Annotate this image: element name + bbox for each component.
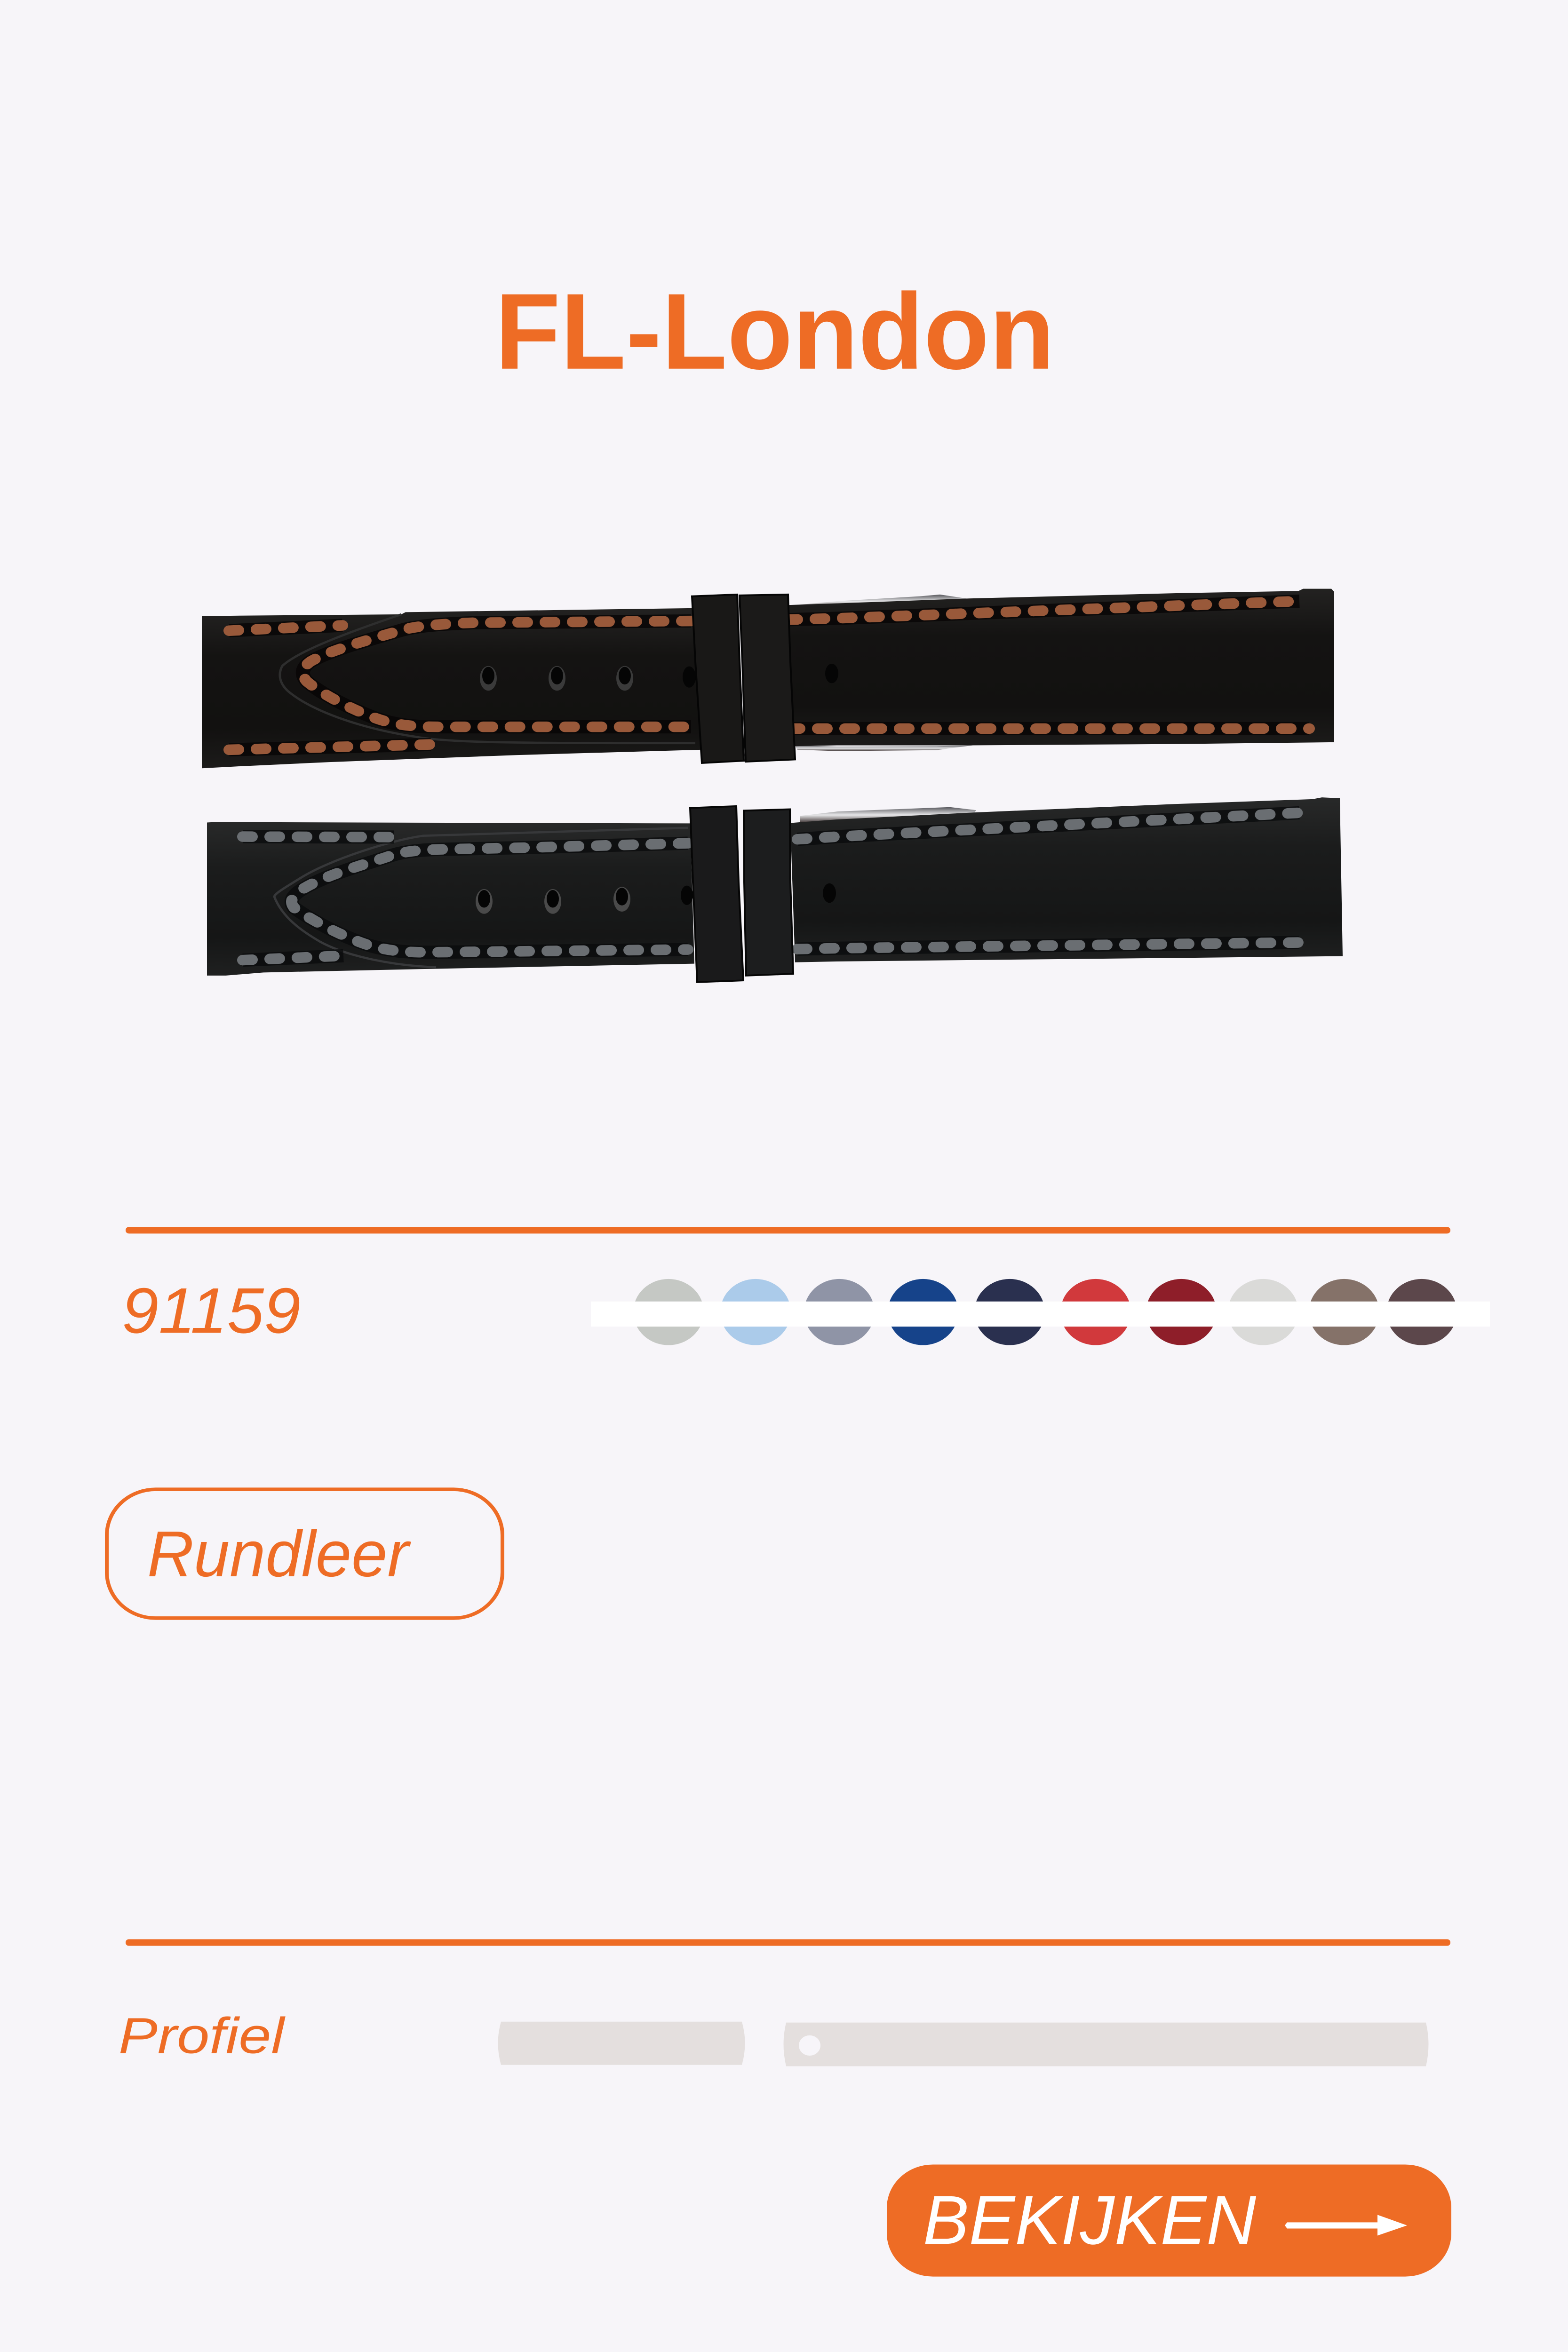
button: BEKIJKEN bbox=[923, 2182, 1256, 2259]
divider bottom bbox=[126, 1939, 1450, 1946]
buckle top, brown-stitched strap bbox=[795, 595, 969, 609]
buckle top, grey-stitched strap bbox=[800, 807, 976, 823]
holes bbox=[480, 664, 838, 691]
button bbox=[887, 2165, 1451, 2277]
stitching under-shadow bbox=[229, 601, 1309, 750]
strap body, left piece bbox=[207, 822, 694, 976]
strap body, right piece bbox=[790, 797, 1343, 962]
profile label: Profiel bbox=[119, 2007, 286, 2064]
tip seam bbox=[280, 614, 695, 743]
colour swatches bbox=[633, 1279, 1457, 1345]
material tag: Rundleer bbox=[147, 1518, 411, 1590]
arrow bbox=[1285, 2215, 1407, 2235]
stitching under-shadow bbox=[243, 813, 1299, 960]
brown stitches bbox=[229, 601, 1309, 750]
buckle bottom, brown-stitched strap bbox=[795, 745, 973, 751]
material tag bbox=[107, 1489, 502, 1618]
holes bbox=[476, 883, 836, 914]
article number: 91159 bbox=[122, 1274, 301, 1346]
profile shape long piece bbox=[784, 2023, 1428, 2066]
keeper loop 2 bbox=[744, 809, 793, 976]
product photo: strap with brown stitching bbox=[202, 589, 1334, 768]
keeper loop 2 bbox=[740, 595, 795, 762]
title: FL-London bbox=[495, 271, 1055, 392]
keeper loop 1 bbox=[690, 806, 743, 982]
strap body, right piece bbox=[786, 589, 1334, 746]
tip seam bbox=[274, 828, 688, 967]
profile shape short piece bbox=[498, 2022, 745, 2065]
divider top bbox=[126, 1227, 1450, 1233]
strap body, left piece bbox=[202, 608, 701, 768]
keeper loop 1 bbox=[692, 595, 744, 763]
grey stitches bbox=[243, 813, 1299, 960]
white swatch band bbox=[591, 1302, 1490, 1327]
product photo: strap with grey stitching bbox=[207, 797, 1343, 982]
